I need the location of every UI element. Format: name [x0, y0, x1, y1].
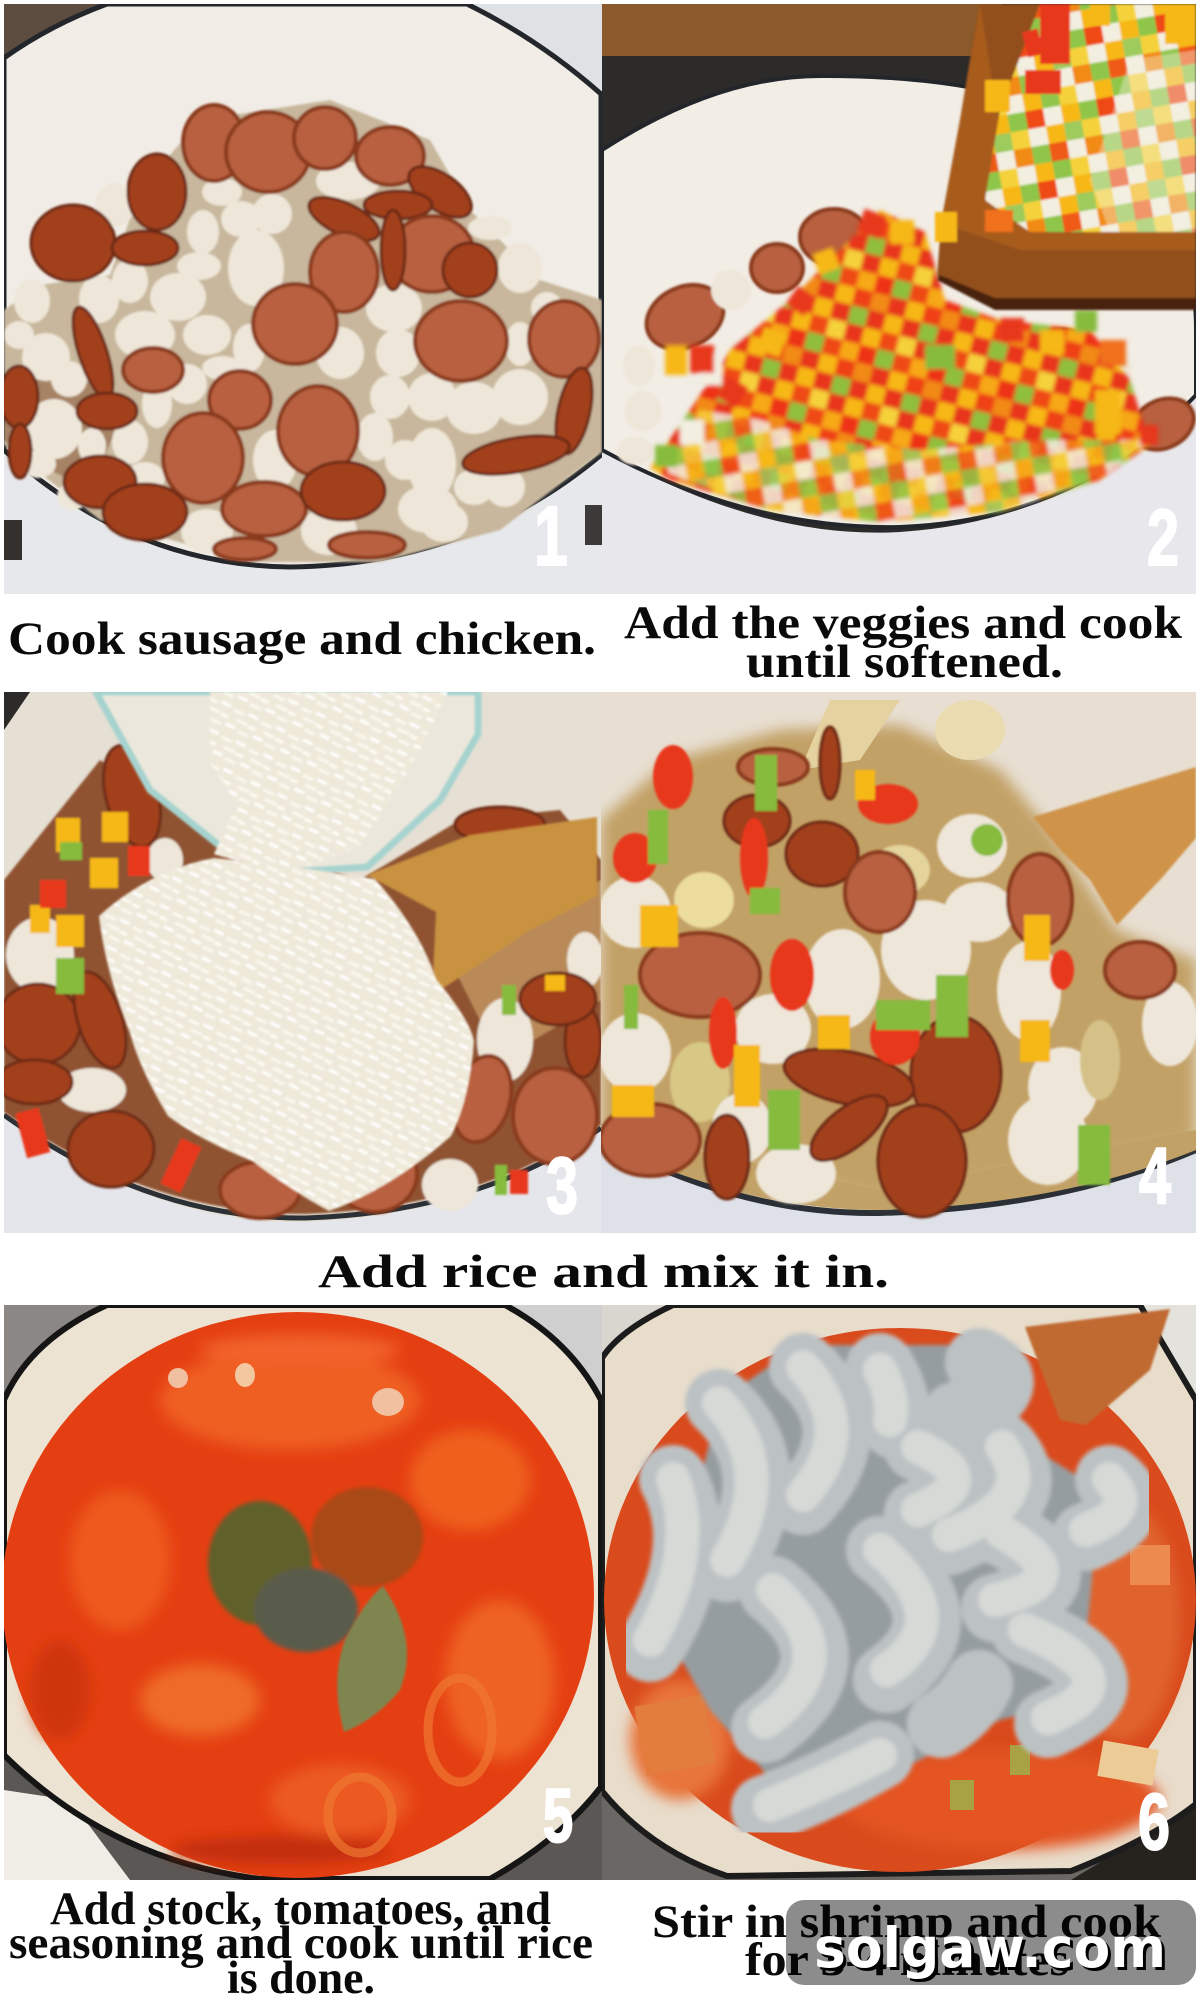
caption 2: until softened.	[746, 636, 1063, 688]
panel: step 2 photo, adding veggies	[602, 4, 1200, 594]
watermark badge: solgaw.com	[817, 1919, 1169, 1983]
caption 5: Add stock, tomatoes, and	[50, 1883, 551, 1935]
cutting board with veggies	[935, 4, 1196, 310]
caption 6: for 3-4 minutes	[745, 1934, 1069, 1986]
rice mound	[99, 858, 474, 1211]
caption 5: seasoning and cook until rice	[9, 1917, 593, 1969]
tomato stock	[2, 1312, 594, 1878]
pot background	[602, 1305, 1196, 1880]
tomato rice	[604, 1328, 1196, 1872]
caption 6	[652, 1896, 1162, 1986]
wooden spoon	[1025, 1309, 1170, 1425]
measuring cup with rice	[96, 692, 478, 875]
caption 1: Cook sausage and chicken.	[8, 613, 596, 665]
food: chicken and sausage slices	[0, 100, 602, 562]
pot background	[4, 1305, 602, 1880]
wooden spoon	[367, 817, 597, 995]
mixed food base	[601, 700, 1196, 1210]
pot background	[601, 692, 1196, 1233]
shrimp pile	[650, 1345, 1125, 1809]
watermark badge	[786, 1900, 1196, 1985]
panel: step 6 photo, shrimp	[602, 1305, 1196, 1880]
number 6: 6	[1138, 1777, 1170, 1866]
number 2: 2	[1147, 493, 1179, 582]
panel: step 1 photo, sausage and chicken	[0, 4, 602, 594]
caption 6: Stir in shrimp and cook	[652, 1896, 1162, 1948]
food: sausage and chicken under veggies	[617, 209, 1200, 465]
number 1: 1	[534, 489, 568, 583]
pot background	[4, 692, 601, 1233]
caption 2	[624, 597, 1183, 688]
caption 2: Add the veggies and cook	[624, 597, 1183, 649]
bay leaf	[337, 1586, 407, 1732]
veggie mound	[650, 209, 1158, 522]
number 3: 3	[546, 1141, 578, 1230]
panel: step 3 photo, pouring rice	[0, 692, 603, 1233]
watermark badge: solgaw.com	[814, 1916, 1166, 1980]
number 5: 5	[543, 1774, 573, 1859]
panel: step 4 photo, rice mixed in	[599, 692, 1198, 1233]
stove and pot background	[602, 4, 1196, 594]
wooden spoon	[1033, 767, 1196, 925]
pot and stove background	[4, 4, 602, 594]
caption 5	[9, 1883, 593, 2000]
food around rice	[0, 739, 603, 1218]
caption 3 and 4: Add rice and mix it in.	[318, 1246, 889, 1298]
panel: step 5 photo, stock and seasoning	[2, 1305, 602, 1880]
spice piles	[208, 1487, 423, 1652]
number 4: 4	[1139, 1131, 1171, 1220]
chicken, veggies and sausage pieces	[599, 727, 1198, 1217]
